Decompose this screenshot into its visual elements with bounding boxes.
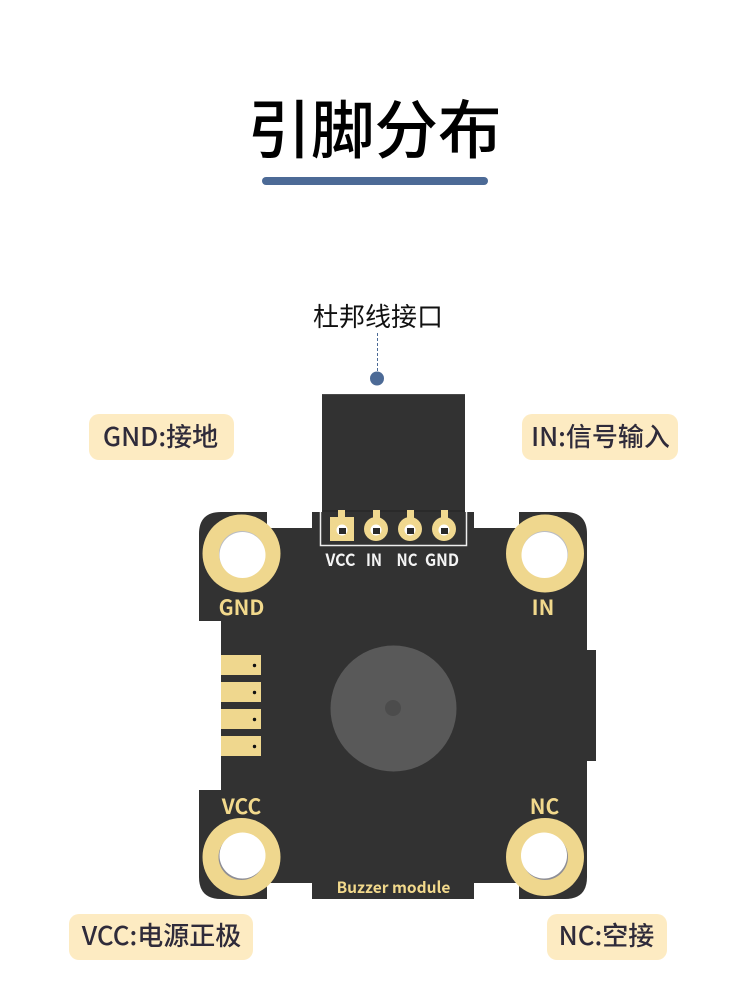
header pin labels: IN <box>366 546 382 571</box>
pin tag: VCC <box>69 914 253 960</box>
header pin GND <box>432 510 456 541</box>
mounting hole label: GND: GND <box>219 592 264 622</box>
title: 引脚分布 <box>248 80 502 172</box>
pin tag: NC: NC:空接 <box>559 916 654 953</box>
pin tag: VCC: VCC:电源正极 <box>81 916 241 953</box>
mounting hole label: IN: IN <box>532 592 554 622</box>
edge connector pads <box>221 655 261 756</box>
pin tag: GND: GND:接地 <box>103 417 218 454</box>
pin tag: IN: IN:信号输入 <box>531 417 670 454</box>
mounting hole: VCC <box>202 818 280 896</box>
header pin labels <box>325 546 459 571</box>
header pin NC <box>398 510 422 541</box>
connector silkscreen frame <box>320 512 466 546</box>
board outline <box>199 512 596 899</box>
buzzer <box>330 646 456 772</box>
dupont connector housing <box>322 394 465 512</box>
mounting hole: NC <box>506 818 584 896</box>
mounting hole label: VCC: VCC <box>221 791 261 821</box>
mounting hole: IN <box>506 514 584 592</box>
header pin IN <box>364 510 388 541</box>
header pin labels: NC <box>396 546 418 571</box>
connector label: 杜邦线接口 <box>313 297 443 334</box>
pin tag: NC <box>547 914 667 960</box>
connector leader line <box>376 333 378 372</box>
header pin labels: GND <box>425 546 459 571</box>
title underline <box>262 177 488 185</box>
module name: Buzzer module <box>337 876 450 898</box>
header pin labels: VCC <box>325 546 356 571</box>
header pin VCC <box>330 510 354 541</box>
mounting hole label: NC: NC <box>530 791 559 821</box>
connector callout <box>313 297 443 386</box>
connector marker dot <box>370 372 384 386</box>
pin tag: GND <box>89 414 234 460</box>
buzzer module board <box>199 394 596 899</box>
mounting hole: GND <box>202 514 280 592</box>
